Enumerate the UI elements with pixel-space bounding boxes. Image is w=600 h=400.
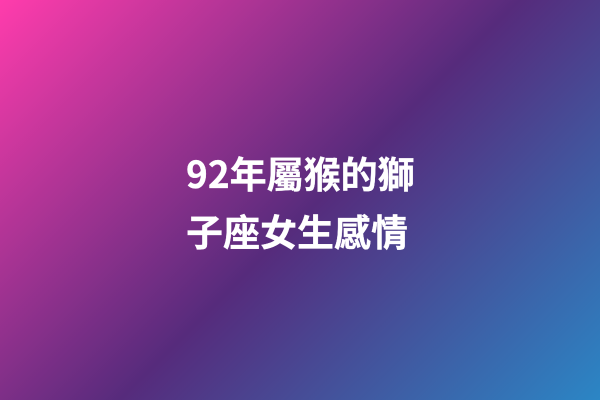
title: 子座女生感情 [186, 203, 408, 257]
title [186, 145, 415, 257]
title: 92年屬猴的獅 [186, 145, 415, 199]
